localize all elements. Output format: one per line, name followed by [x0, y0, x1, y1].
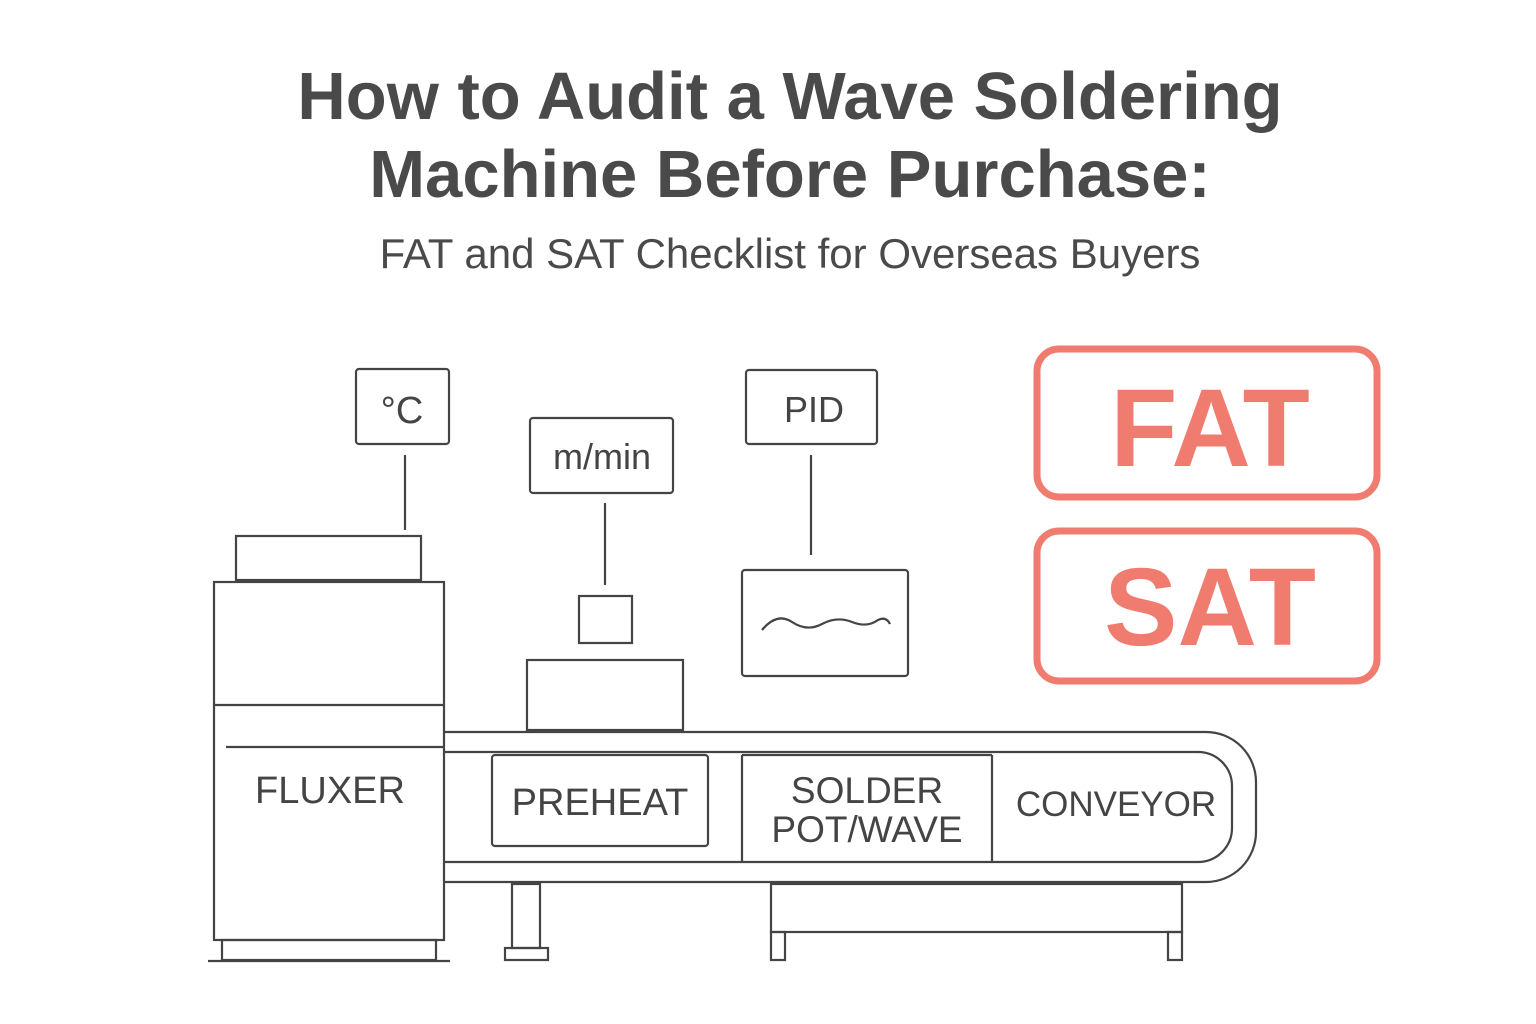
PID controller [742, 370, 908, 676]
temperature gauge label [356, 369, 449, 530]
title: How to Audit a Wave Soldering [297, 59, 1283, 134]
FAT badge: FAT [1110, 367, 1310, 490]
title [297, 59, 1283, 212]
title: Machine Before Purchase: [369, 137, 1211, 212]
conveyor body [444, 732, 1256, 882]
conveyor body: POT/WAVE [771, 809, 963, 850]
fluxer unit [208, 536, 450, 961]
subtitle: FAT and SAT Checklist for Overseas Buyers [380, 230, 1200, 277]
legs and stand [505, 884, 1182, 960]
SAT badge: SAT [1104, 546, 1316, 669]
speed label m/min: m/min [553, 436, 651, 477]
conveyor body: SOLDER [791, 770, 943, 811]
speed label m/min [527, 418, 683, 730]
temperature gauge label: °C [381, 390, 423, 432]
conveyor body: PREHEAT [512, 782, 688, 824]
fluxer unit: FLUXER [255, 770, 405, 812]
PID controller: PID [784, 389, 844, 430]
FAT badge [1037, 349, 1377, 497]
SAT badge [1037, 531, 1377, 681]
conveyor body: CONVEYOR [1016, 785, 1216, 824]
